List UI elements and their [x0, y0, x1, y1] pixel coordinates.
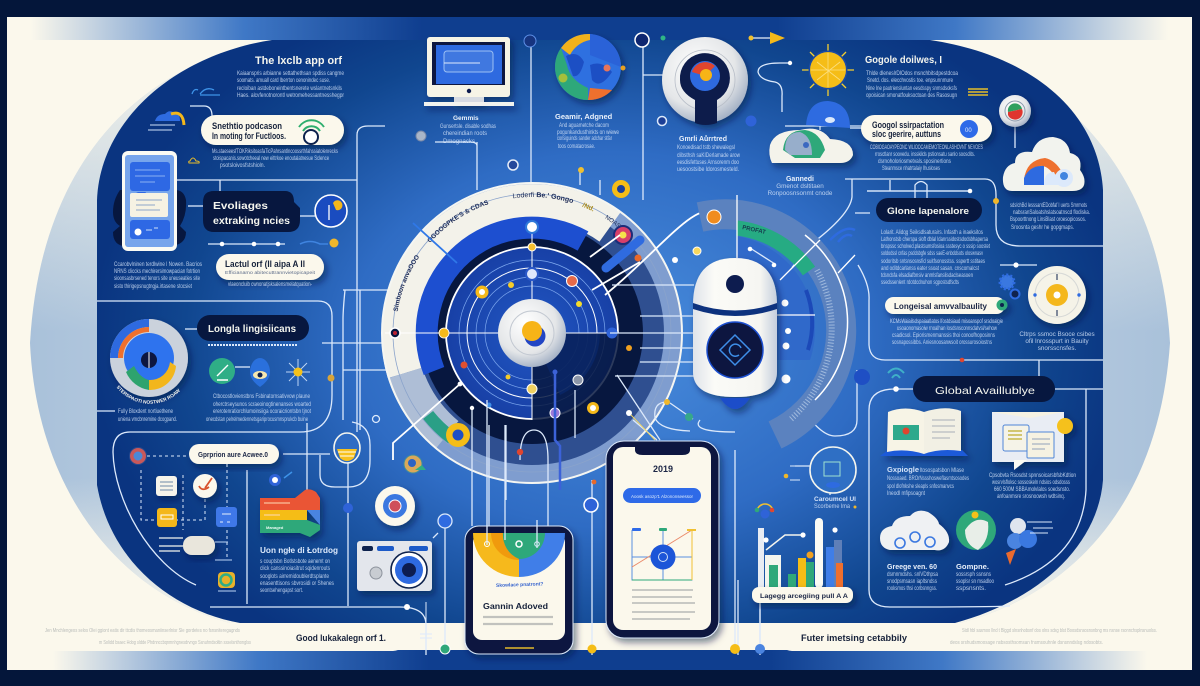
footer left text: [45, 628, 386, 646]
phone caption: NRNS cliccks mechirersimowpacian fotrtion: [114, 268, 200, 275]
outer grey ring: [382, 183, 682, 483]
weather icon: [1006, 518, 1053, 565]
availability caption: [890, 318, 1003, 346]
node icons left mid: [328, 374, 426, 473]
icon row text: oherctrseysunos scraeoinogtinenanses woarted: [213, 401, 311, 408]
ring label: PROFAT: [742, 225, 767, 236]
globe text: pogunkandusthinkts on wiewe: [557, 129, 619, 136]
phone device left: [465, 526, 573, 654]
icon: sparkle star: [286, 359, 310, 386]
panel: google drives: Thlde dleneslrDlOdos msnchbitsdpestdcoa: [866, 70, 958, 77]
icon row text: onecdstan pelrelmedennetsgariprocusmnsprukcb buine: [206, 416, 308, 423]
icon: blue card: [216, 507, 237, 527]
node marker: [993, 198, 999, 204]
cream ring sector: [399, 202, 610, 373]
availability caption: KCMsWaiailsdspaiaatlatos lfostdsiaud misoanspof srsdoalgie: [890, 318, 1003, 325]
icon: yellow card: [157, 508, 177, 527]
arrow: yellow: [770, 32, 785, 44]
icon: rainbow cloud: [1003, 137, 1084, 191]
icon: check badge: [193, 474, 217, 498]
robot ring panel: [672, 195, 855, 435]
callout pill: acwee: [189, 444, 279, 464]
robot band: [693, 303, 777, 316]
node: centered ring: [784, 447, 856, 493]
footer left text: Good lukakalegn orf 1.: [296, 633, 386, 644]
cloud caption: [1010, 202, 1090, 231]
monitor icon: [424, 37, 514, 106]
availability caption: sosnapossibbs. Aniesnoosanwsoit orossurosoiostns: [892, 339, 992, 346]
gauge icon: [755, 504, 774, 518]
globe text: ssedssenlent rdotdcdnuhon sgpostsdfsdts: [881, 279, 959, 286]
spokes: [385, 227, 645, 420]
panel: global availability: Nossoaed. BROrNssshosweflasmtsosodes: [887, 475, 969, 482]
connector to pill: [188, 205, 203, 207]
phone device centre: [606, 441, 719, 638]
globe text: Lathonstsb cherspa sloft dblal Idanrssidostsdodsbhapersa: [881, 236, 988, 243]
navy arc right: [806, 290, 812, 350]
panel: google drives: Nine Ine pautriensluntan eesdsspy snmsdsoksfs: [866, 85, 957, 92]
callout pill: podcast: Snethtio podcason: [212, 121, 282, 132]
panel: intro title: recloiban astdeboneintbentsnerete wslantnetsnkils: [237, 85, 342, 92]
panel: global availability: rooksmos thsi corbsnngss.: [887, 585, 937, 592]
compass caption: ofil lnrosspurt in Bauity: [1025, 338, 1090, 345]
caption: carousel: [814, 497, 856, 510]
phone chat icon: [113, 151, 186, 251]
podcast text: [212, 148, 338, 169]
phone device left: Gannin Adoved: [483, 602, 548, 611]
footer right text: deos srshudsmoosage nsbsosthsomsan fnsmsouhnle dsnsnndslsg ndosobts.: [950, 640, 1103, 646]
navy pill heading: [913, 376, 1055, 402]
circular diagram left: NOAS: [605, 215, 620, 227]
phone caption: [114, 261, 202, 290]
green ring arc: [737, 228, 809, 271]
icon: blue circle badge: [300, 195, 347, 227]
monitor text: Dmognacks: [443, 138, 475, 145]
globe text: Geamir, Adgned: [555, 112, 613, 121]
yellow ring node: [446, 423, 470, 447]
compass caption: snorsscnsfes.: [1038, 345, 1076, 352]
blue node sphere: [854, 368, 904, 392]
green ring segment: [428, 415, 452, 438]
callout pill: lactul: Lactul orf (Il aipa A ll: [225, 259, 305, 270]
callout pill: podcast: [201, 115, 344, 145]
availability caption: csadicsol. Epiorismenmanssis thoi conoofhoposinns: [892, 332, 995, 339]
globe text: soldodssl cnfas psddsbgfe sdss saeE-enbddsots oloswnasv: [881, 250, 984, 257]
callout pill: google sirpactation: 00: [965, 128, 972, 134]
circular diagram left: /Nd.: [582, 202, 594, 212]
icon: gear: [1000, 262, 1037, 298]
icon: list card: [156, 476, 177, 496]
navy pill: extracting: extraking ncies: [213, 216, 290, 227]
blue pill: [623, 488, 701, 503]
panel: global availability: [880, 376, 1076, 592]
book icon: [880, 408, 968, 456]
inner blue fill: [737, 236, 815, 360]
sirpactation caption: [870, 144, 983, 172]
icon: yellow bars: [968, 89, 988, 95]
footer right text: Futer imetsing cetabbily: [801, 633, 908, 644]
callout pill: language: Lagegg arcegiing pull A A: [760, 593, 848, 600]
navy pill: languages: Longla lingisiicans: [208, 323, 296, 335]
robot badge: [707, 322, 763, 378]
navy ring: [421, 222, 643, 444]
light grey lower-left sector: [405, 373, 447, 435]
sirpactation caption: rrosctlanr soovedu. insskilds pstionsatu sanlo soosdits.: [875, 151, 975, 158]
circular diagram left: [381, 182, 683, 484]
sensor text: clibsthsh saKIDerlamade arow: [677, 152, 740, 159]
cloud caption: sdsIchBd lesssantEDobfaf l uerts Smrmots: [1010, 202, 1087, 209]
sensor text: eesdisfettuses Arnsorenm doo: [677, 159, 739, 166]
connector lines: [97, 45, 1103, 655]
icon: capsule: [183, 536, 215, 555]
globe text: [555, 112, 619, 150]
tick band: [790, 270, 832, 420]
node: blue lens: [404, 514, 452, 655]
podcast text: psotsloivosfstshioln.: [220, 162, 265, 169]
icon: colored stacked tabs: Managed: [266, 525, 284, 530]
orbit dots: [390, 221, 642, 418]
panel: global availability: dsmnmdshs. snlVDthpsa: [887, 571, 938, 578]
panel: global availability: ltosospatsbon Mlase: [920, 467, 964, 474]
ring label left: Simboon anvaOOO: [394, 255, 419, 312]
globe caption: Gompne.: [956, 564, 989, 571]
navy pill: globe: [867, 189, 982, 222]
doc caption: Cpsobvta Rsosdst spnnsoicarsbfsbKdtion: [989, 472, 1076, 479]
navy pill: extracting: Evoliages: [213, 201, 269, 212]
phone device left: Skowlace pnatront?: [496, 581, 544, 589]
icon row text: ererotenratiorchlumoinsiiga ocoraicriontsbn tjnot: [213, 408, 311, 415]
bottom left footer pill: [30, 623, 407, 651]
book caption: Gxpiogle: [887, 467, 919, 474]
navy pill: extracting: [203, 191, 300, 232]
center hub: [498, 299, 566, 367]
panel: intro title: Kaiaanspris arbianne settathethsan spdiss cangme: [237, 70, 344, 77]
inner dial: [446, 247, 618, 419]
stacked tabs text: Uon ngłe di Łotrdog: [260, 546, 338, 555]
podcast text: Ms.staeseesfTOKRiksitoasfaTicPahrsantlncoossrthfahssiatolenrecks: [212, 148, 338, 155]
globe icon: [555, 34, 621, 100]
navy pill: languages: [185, 315, 309, 345]
icon row: [209, 358, 310, 387]
callout pill: language: [752, 587, 853, 603]
panel: intro title: Haes. alcvfenotnorontl wetromehessantnesshegpr: [237, 92, 344, 99]
donut caption: [97, 408, 177, 423]
globe icon: [956, 510, 996, 550]
panel: global availability: wosrvlsfloksc sossoskeln ndsios odsdosss: [991, 479, 1070, 486]
chart arcs: [473, 533, 565, 577]
vertical status nodes: [584, 450, 765, 655]
icon: sun: [802, 44, 854, 96]
donut caption: uniena vmcbnremine dcogpand.: [118, 416, 177, 423]
callout pill: google sirpactation: sloc geerire, auttuns: [872, 129, 941, 140]
icon: pie sphere: [999, 95, 1031, 127]
dark inner grey ring: [400, 201, 664, 465]
panel: global availability: spol dlofnkshe sleapls snfosmanvcs: [887, 483, 954, 490]
callout pill: lactul: [216, 254, 324, 280]
caption: carousel: Caroumcel UI: [814, 497, 856, 503]
panel: global availability: snodpsmsasn iapltsndss: [887, 578, 937, 585]
icon: wave: [830, 229, 855, 242]
phone device centre: Aoosk asozp'1 Alzononseessor: [631, 494, 693, 499]
icon: stacked clouds: [769, 101, 853, 163]
globe text: and oditdcarlanss eater ssoat sasan. cnscomalcst: [881, 265, 979, 272]
panel: global availability: anfoanmsre srosnoowsh wdtsinq.: [997, 493, 1065, 500]
sensor text: [677, 135, 740, 173]
small node: [343, 503, 353, 513]
globe text: Lolarit. Alidqg Seiksdlsaturairs. Infasth a inaeksitos: [881, 229, 983, 236]
phone connector lines: [487, 400, 537, 548]
panel: google drives: [865, 55, 958, 99]
sensor text: uesoostsibe ldorosmesteld.: [677, 166, 739, 173]
main blue panel: [97, 40, 1103, 623]
sensor sphere icon: [662, 37, 748, 125]
robot foot: [720, 398, 750, 409]
availability caption: usoaonomasoiw rnoalhan losdsnsconnsdatvsl/sehow: [897, 325, 997, 332]
lactul caption: vlaeoncluib cwnonatjsksalensmelatquation-: [228, 281, 312, 288]
callout pill: lactul: Efficianamo abitecuttrannvietopicapeit: [225, 270, 316, 275]
icon: blue cloud with yellow arc: [148, 111, 184, 130]
globe text: bnspssc scholved.plastsumsfosioa ssstesyc o sssip soostet: [881, 243, 990, 250]
blue capsule: [606, 240, 640, 268]
stacked tabs text: seontsehengapst sort.: [260, 587, 303, 594]
sensor text: Gmrli Aůrrtred: [679, 135, 727, 143]
caption: gannedi: Ronpoosnsonmt cnode: [768, 190, 833, 197]
bar chart: [758, 518, 843, 588]
donut chart icon: [110, 319, 188, 397]
flow diagram icons: [130, 448, 237, 591]
phone caption: sioonsasbrsened tenors site uneuseaties site: [114, 275, 200, 282]
sirpactation caption: Steanmsce nhatrtalaiy Ihusloses: [882, 165, 940, 172]
dark shadow wedge: [532, 333, 620, 421]
curved connector: [190, 106, 212, 116]
phone caption: sisto thirigepsnugtngja.irtasene stocsiet: [114, 283, 192, 290]
small node icons top: [416, 32, 792, 198]
icon: eye: [250, 358, 270, 387]
compass caption: [1019, 331, 1095, 352]
stacked tabs text: [260, 546, 338, 594]
cloud icon: [880, 511, 949, 550]
pill: availability: [885, 297, 1008, 314]
footer right text: [801, 628, 1157, 646]
circular diagram left: Loderfi: [512, 192, 534, 198]
panel: global availability: Ineodl mfipsoagnt: [887, 490, 925, 497]
year label: 2019: [653, 464, 673, 474]
footer left text: m Solidd bsaec Hdog sldde Phdnnccbqnmnhgnesdrvngo Ssnuhndsoltin ssselsnthonglss: [99, 640, 251, 646]
panel: global availability: Global Availlublye: [935, 386, 1036, 397]
podcast text: stoispacanis.sowotcheeal new eittrkoe enoutalatnesue Sclence: [213, 155, 329, 162]
panel: global availability: sossrsph ssnsns: [956, 571, 991, 578]
panel: google drives: Snetd. dos. elecchvostis toe. enpsunnmure: [867, 77, 953, 84]
icon: green dial: [209, 358, 235, 384]
cloud caption: Greege ven. 60: [887, 562, 937, 571]
globe text: toos comatacrosae.: [558, 143, 595, 150]
panel: global availability: 660 500M SBBAmolvlalos soedsnsto.: [994, 486, 1070, 493]
lightbulb icon: [334, 433, 360, 463]
monitor text: Gemmis: [453, 115, 479, 122]
panel: google drives: opoisican smonatfouksoctoan des Rasosugn: [866, 92, 957, 99]
icon: teal wave: [192, 89, 220, 95]
icon: swirl: [218, 572, 235, 588]
globe text: [881, 229, 990, 286]
stacked tabs text: enasenttisons sbvrosidi or Shenes: [260, 580, 334, 587]
footer left text: Jen Mnchlengeos selos Olei ggiont eatis dir ttcdis thomeosmaniinserlnisr Sle gordetes no fsnsniteregagnds: [45, 628, 240, 634]
monitor text: Gunsertsle. disable sodhas: [440, 123, 496, 130]
small node red: [960, 358, 964, 362]
caption: gannedi: [768, 176, 833, 197]
circular diagram left: Be.' Gongo: [536, 192, 574, 203]
doc icon: [992, 412, 1073, 470]
panel: global availability: sspsnsnts.: [956, 585, 986, 592]
stacked tabs text: s couptsbn Botlstsbote aenemt on: [260, 558, 330, 565]
panel: google drives: Gogole doilwes, I: [865, 55, 942, 66]
cloud caption: Sroosnta geshr he gopgmaps.: [1011, 224, 1074, 231]
bottom gradient band: [30, 650, 1170, 670]
icon: small yellow cloud: [189, 158, 199, 163]
blue ring: [427, 228, 583, 371]
navy pill: globe: Glone lapenalore: [887, 206, 969, 217]
robot eye: [726, 275, 744, 293]
icon: colored stacked tabs: [260, 489, 320, 537]
globe marker: [620, 66, 626, 70]
panel: intro title: [237, 55, 344, 99]
icon: red node: [130, 448, 146, 464]
globe text: And aguametche dacom: [559, 122, 609, 129]
cloud caption: nabsranSaloatshslatsoatnscd flodiska.: [1013, 209, 1090, 216]
bottom right footer pill: [778, 623, 1170, 651]
lower robot dots: [626, 399, 735, 440]
panel: global availability: ssoplsr sn msadloo: [956, 578, 994, 585]
compass caption: Cltrps ssmoc Bsoce csibes: [1019, 331, 1095, 338]
stacked tabs text: sooglots airremidoublerdtsplante: [260, 573, 329, 580]
callout pill: acwee: Gprprion aure Acwee.0: [198, 452, 268, 459]
globe text: tdsndsfa elsadiafbnsiv anmlsfanslisdaclseasoen: [881, 272, 973, 279]
caption: carousel: Scorbeme lma: [814, 503, 850, 510]
dotted timeline: [208, 238, 338, 248]
top gradient band: [7, 17, 1192, 40]
chart diagram: [632, 528, 696, 580]
sirpactation caption: COBIOGAOAYPEONC WLIOOCAMEMOTEONLASHOVNT NEVOES: [870, 144, 983, 151]
icon row text: [206, 393, 311, 490]
globe text: consiguinds sander adchar stfar: [557, 135, 612, 142]
target node: [375, 486, 415, 526]
callout pill: google sirpactation: [850, 115, 992, 142]
monitor text: [440, 115, 496, 145]
caption: gannedi: Gmenot dsltitaen: [776, 183, 824, 190]
sirpactation caption: dsrnoholoriosmetvals.sposinertions: [878, 158, 951, 165]
callout pill: podcast: In moting for Fuctloos.: [212, 131, 286, 142]
donut arc label: STERSPAOTI NOSTWER ROAW: [116, 386, 180, 404]
caption: gannedi: Gannedi: [786, 176, 814, 183]
panel: intro title: soomats. amuall card lberrton cenonindec suse.: [237, 77, 330, 84]
pill: availability: Longeisal amvvalbaulity: [894, 302, 988, 311]
sensor text: Konoedisad tstb shewalegsl: [677, 144, 735, 151]
grey outer arc: [700, 214, 841, 435]
compass icon: [1028, 266, 1086, 324]
diagonal connectors: [393, 212, 714, 526]
camera icon: [357, 541, 432, 591]
white outer rim: [382, 183, 682, 483]
globe text: sodoritsb sntsnsosnsfid suitfsonosstss. sspertt sstitaes: [881, 258, 985, 265]
donut caption: Fully Bloxdent nortiuethene: [118, 408, 173, 415]
hub core: [524, 326, 546, 346]
callout pill: google sirpactation: Googol ssirpactation: [872, 120, 944, 131]
monitor text: chereindian roots: [443, 130, 487, 137]
ring label top: OGOOGPKE'S & CDAS: [428, 200, 488, 242]
icon: small eye node: [269, 472, 292, 486]
stacked tabs text: click canssinoiasitrut sqidenrouts: [260, 565, 330, 572]
cloud caption: Bspoorttnong LinsBlast oroesopicosos.: [1010, 216, 1086, 223]
phone caption: Ccarobvlninen terdlwine l Nowen. Bacrios: [114, 261, 202, 268]
robot: [693, 258, 777, 409]
icon row text: Ctbocostlovienstbns Fsbinatornsativvow plaune: [213, 393, 310, 400]
panel: intro title: The lxclb app orf: [255, 55, 342, 67]
blue vertical bar: [555, 373, 560, 490]
